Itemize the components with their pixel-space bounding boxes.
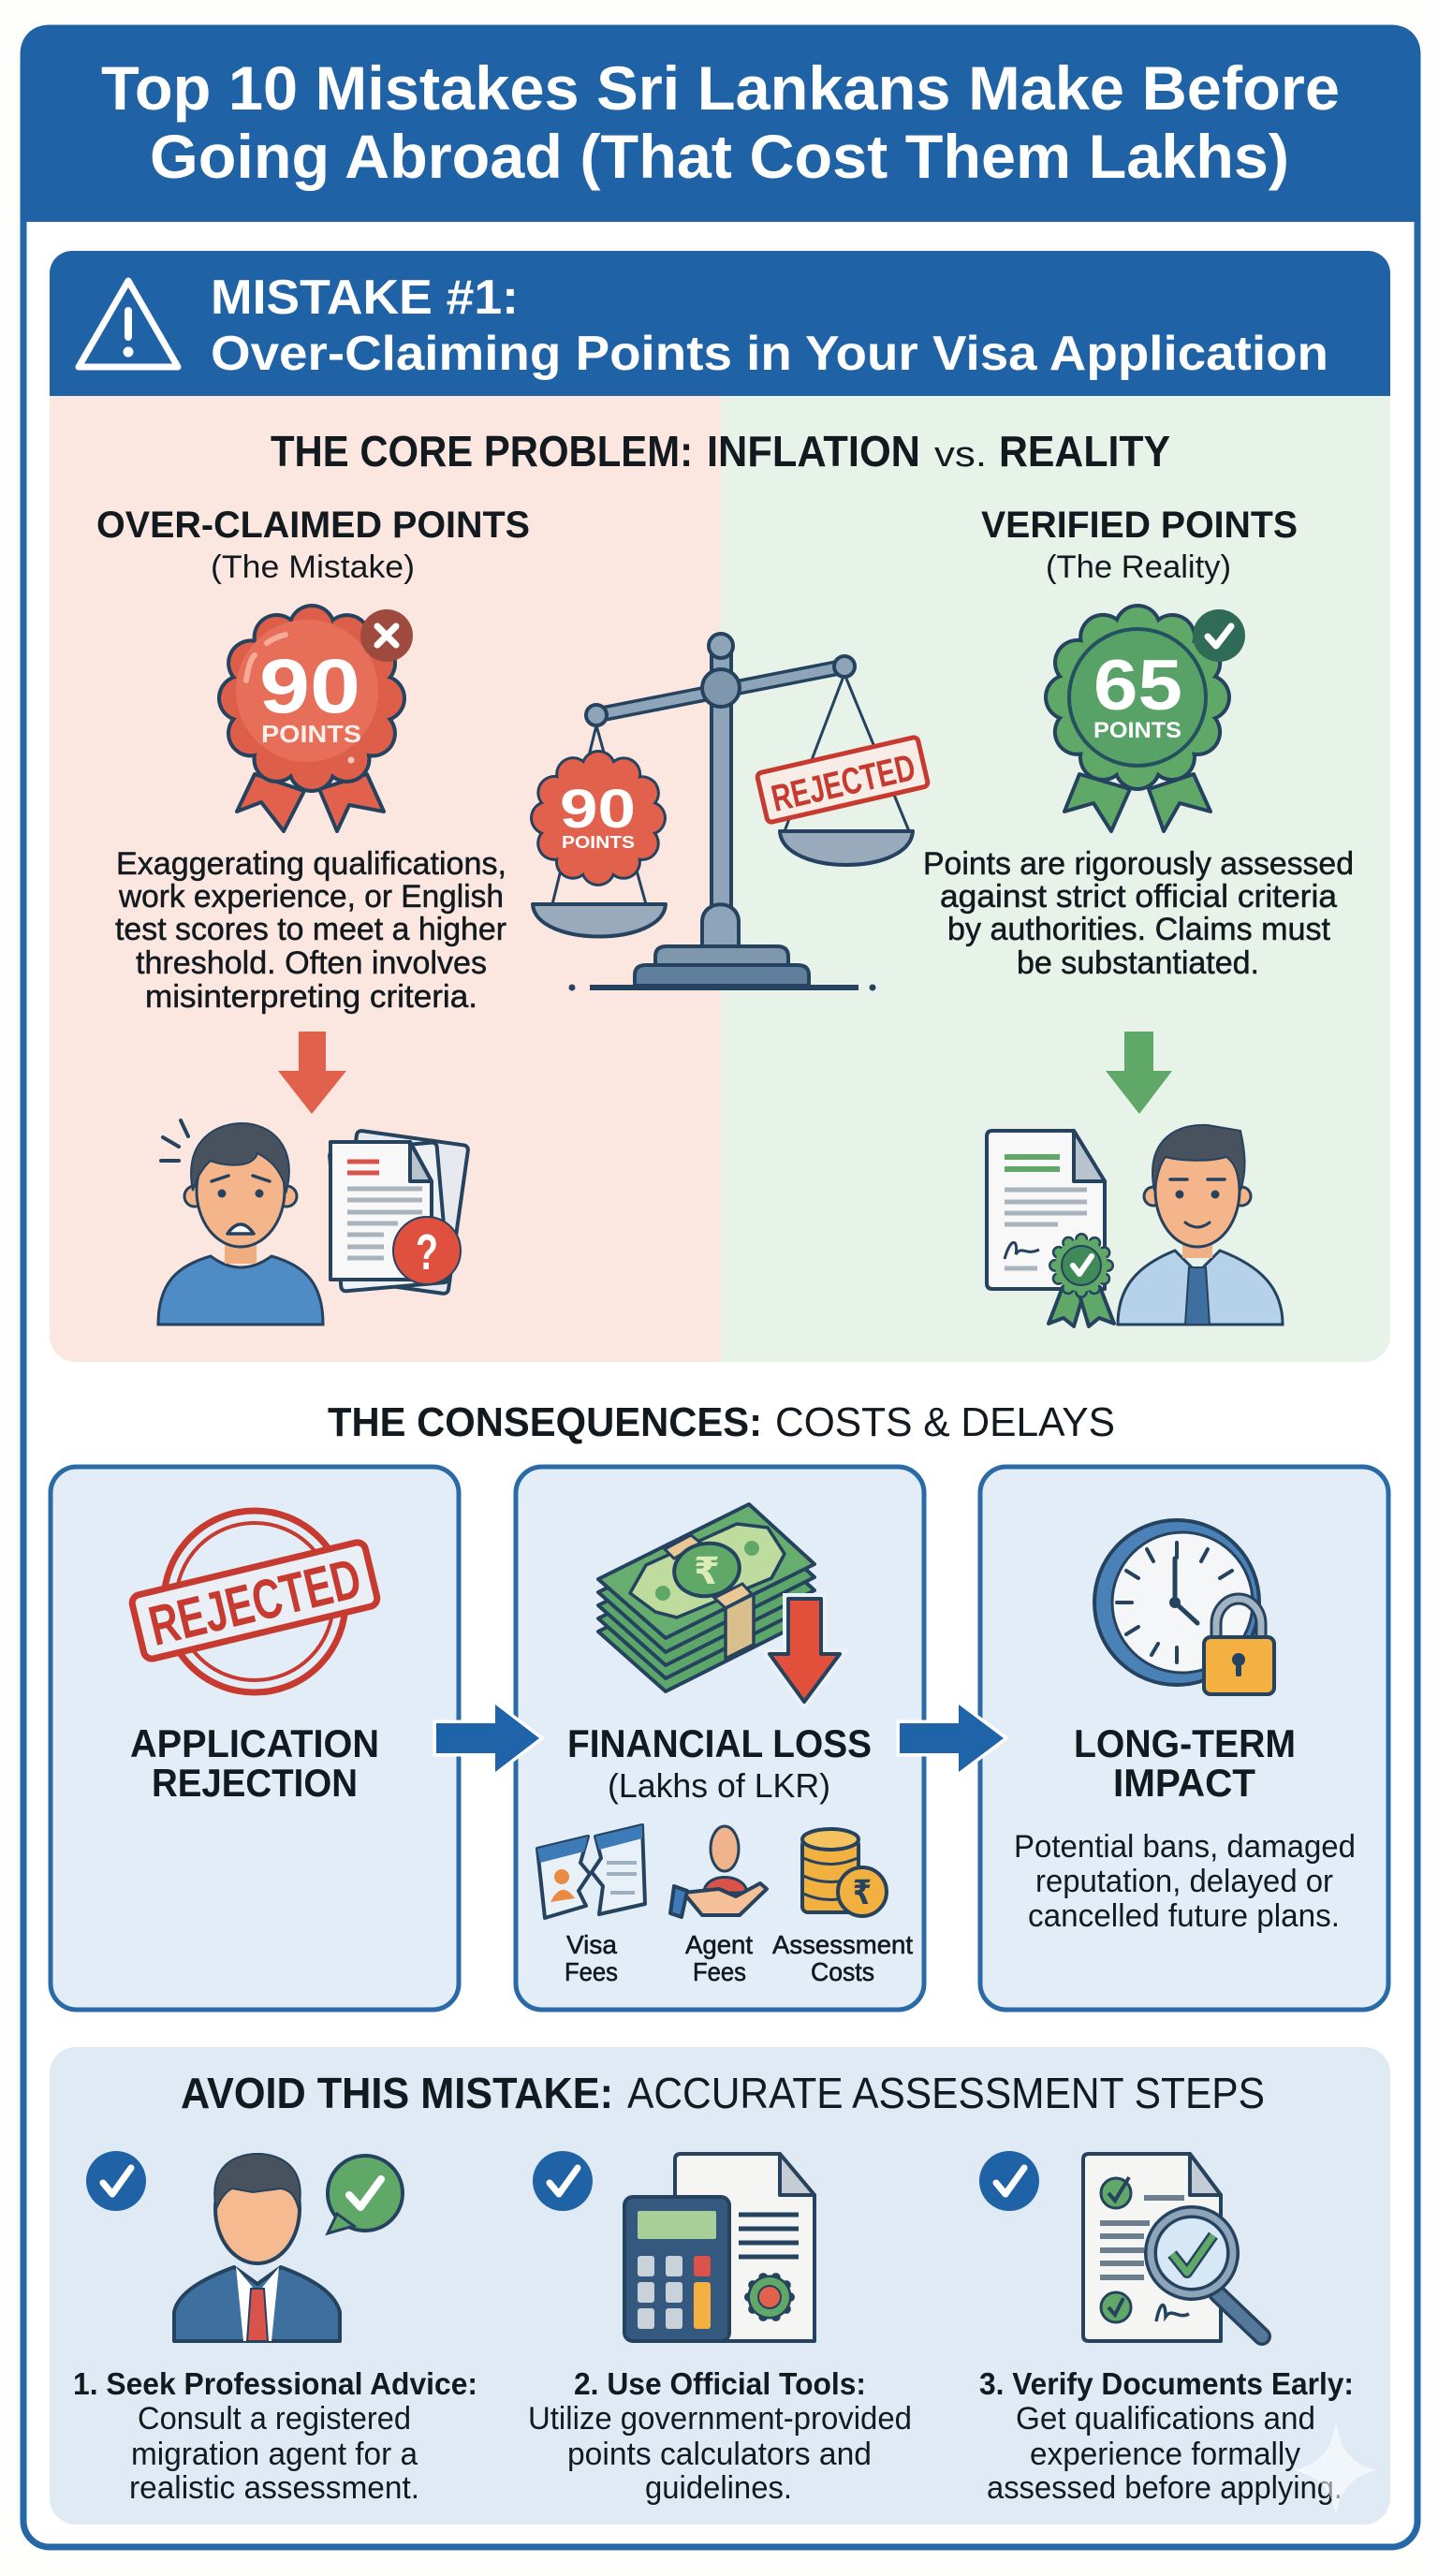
avoid heading <box>181 2069 1265 2117</box>
icon: checklist with magnifier <box>1083 2154 1262 2341</box>
step 2 text: 2. Use Official Tools: <box>574 2366 866 2401</box>
panel: core problem comparison <box>50 251 1390 1362</box>
right column heading: (The Reality) <box>1046 549 1231 585</box>
icon: check badge <box>1193 609 1245 662</box>
panel: application rejection <box>51 1467 459 2010</box>
icon: advisor with speech bubble <box>174 2154 403 2341</box>
arrow: red down <box>278 1032 346 1114</box>
long-term impact description <box>1014 1829 1356 1934</box>
step 3 text <box>979 2366 1354 2506</box>
icon: worried person with documents <box>158 1120 469 1325</box>
step 1 check badge <box>86 2151 146 2211</box>
arrow: loss to impact <box>900 1705 1004 1772</box>
application rejection label: APPLICATION <box>130 1721 379 1765</box>
cost labels: Agent <box>685 1930 753 1959</box>
financial loss label: FINANCIAL LOSS <box>567 1721 872 1765</box>
step 2 text: points calculators and <box>567 2437 872 2472</box>
icon: 65 points rosette: 65 <box>1093 646 1182 725</box>
application rejection label: REJECTION <box>152 1761 358 1805</box>
avoid heading: AVOID THIS MISTAKE: <box>181 2069 613 2117</box>
long-term impact label: IMPACT <box>1113 1761 1255 1805</box>
mistake heading <box>211 271 1328 381</box>
icon: 65 points rosette: POINTS <box>1093 718 1181 743</box>
icon: approved certificate <box>987 1131 1114 1326</box>
mistake heading: MISTAKE #1: <box>211 271 519 325</box>
icon: 90 points rosette: 90 <box>259 644 360 729</box>
step 2 text: Utilize government-provided <box>528 2401 912 2437</box>
left description <box>115 846 506 1015</box>
left column heading: (The Mistake) <box>211 549 415 585</box>
right description: be substantiated. <box>1017 945 1259 981</box>
panel: long-term impact <box>980 1467 1388 2010</box>
panel: avoid this mistake <box>50 2047 1390 2525</box>
icon: torn visa <box>537 1825 645 1918</box>
icon: x badge <box>360 609 413 662</box>
icon: small 90 rosette <box>548 768 649 869</box>
core problem heading <box>271 427 1170 476</box>
step 3 text: assessed before applying. <box>987 2470 1343 2506</box>
step 2 check badge <box>533 2151 593 2211</box>
title text: Top 10 Mistakes Sri Lankans Make Before <box>101 53 1340 123</box>
long-term impact description: Potential bans, damaged <box>1014 1829 1356 1865</box>
long-term impact label <box>1074 1721 1296 1805</box>
long-term impact label: LONG-TERM <box>1074 1721 1296 1765</box>
right column heading <box>981 505 1298 585</box>
icon: document stack with question mark <box>330 1130 469 1295</box>
core problem heading: INFLATION <box>707 427 920 476</box>
step 2 text <box>528 2366 912 2506</box>
core problem heading: REALITY <box>999 427 1170 476</box>
right description <box>923 846 1354 981</box>
icon: 90 points rosette <box>236 609 413 831</box>
icon: 90 points rosette: POINTS <box>261 720 361 748</box>
consequences heading: COSTS & DELAYS <box>775 1399 1115 1445</box>
step 3 text: experience formally <box>1030 2437 1300 2472</box>
icon: small 90 rosette: POINTS <box>562 833 635 852</box>
cost labels: Fees <box>565 1957 618 1986</box>
panel: financial loss <box>516 1467 924 2010</box>
step 1 text: realistic assessment. <box>129 2470 419 2506</box>
step 1 text: migration agent for a <box>131 2437 418 2472</box>
right description: Points are rigorously assessed <box>923 846 1354 882</box>
rejected stamp on scale: REJECTED <box>768 747 919 820</box>
cost labels: Fees <box>693 1957 746 1986</box>
icon: clock with padlock <box>1094 1520 1274 1694</box>
icon: agent with hand <box>670 1826 767 1917</box>
long-term impact description: reputation, delayed or <box>1035 1864 1333 1899</box>
mistake heading: Over-Claiming Points in Your Visa Application <box>211 327 1328 381</box>
left column heading <box>96 505 530 585</box>
icon: rejected stamp <box>130 1511 379 1692</box>
arrow: green down <box>1106 1032 1172 1114</box>
icon: speech bubble check <box>328 2156 403 2233</box>
consequences heading <box>328 1399 1115 1445</box>
left description: Exaggerating qualifications, <box>116 846 506 882</box>
icon: coins with rupee <box>802 1829 887 1916</box>
icon: warning triangle <box>79 281 178 367</box>
step 1 text: 1. Seek Professional Advice: <box>73 2366 477 2401</box>
step 3 text: Get qualifications and <box>1016 2401 1315 2437</box>
icon: document stack with question mark: ? <box>416 1224 438 1281</box>
right description: against strict official criteria <box>940 879 1337 915</box>
icon: 65 points rosette <box>1064 609 1245 831</box>
step 3 check badge <box>979 2151 1039 2211</box>
cost labels <box>565 1930 913 1986</box>
icon: coins with rupee: ₹ <box>853 1873 872 1911</box>
step 2 text: guidelines. <box>645 2470 792 2506</box>
financial loss label: (Lakhs of LKR) <box>608 1766 830 1805</box>
step 1 text: Consult a registered <box>138 2401 411 2437</box>
step 3 text: 3. Verify Documents Early: <box>979 2366 1354 2401</box>
icon: cash stack with down arrow <box>598 1504 840 1702</box>
left description: work experience, or English <box>118 879 504 915</box>
icon: cash stack with down arrow: ₹ <box>694 1551 720 1592</box>
right column heading: VERIFIED POINTS <box>981 505 1298 546</box>
core problem heading: THE CORE PROBLEM: <box>271 427 693 476</box>
title text: Going Abroad (That Cost Them Lakhs) <box>150 122 1289 191</box>
core problem heading: vs. <box>934 435 987 475</box>
left column heading: OVER-CLAIMED POINTS <box>96 505 530 546</box>
application rejection label <box>130 1721 379 1805</box>
cost labels: Visa <box>566 1930 617 1959</box>
left description: misinterpreting criteria. <box>145 979 477 1015</box>
consequences heading: THE CONSEQUENCES: <box>328 1399 762 1445</box>
long-term impact description: cancelled future plans. <box>1028 1898 1340 1934</box>
title text <box>101 53 1340 191</box>
cost labels: Costs <box>811 1957 874 1986</box>
icon: confident person with certificate <box>987 1125 1283 1326</box>
mistake banner <box>50 251 1390 396</box>
left description: test scores to meet a higher <box>115 912 506 947</box>
right description: by authorities. Claims must <box>947 912 1331 947</box>
icon: sparkle <box>1294 2421 1376 2516</box>
financial loss label <box>567 1721 872 1805</box>
icon: calculator and document <box>624 2154 814 2341</box>
arrow: rejection to loss <box>436 1705 539 1772</box>
avoid heading: ACCURATE ASSESSMENT STEPS <box>627 2069 1265 2117</box>
icon: small 90 rosette: 90 <box>560 779 636 840</box>
step 1 text <box>73 2366 477 2506</box>
title banner <box>21 25 1420 222</box>
icon: rejected stamp: REJECTED <box>143 1546 367 1658</box>
cost labels: Assessment <box>772 1930 913 1959</box>
left description: threshold. Often involves <box>136 945 487 981</box>
icon: balance scale <box>533 634 929 990</box>
